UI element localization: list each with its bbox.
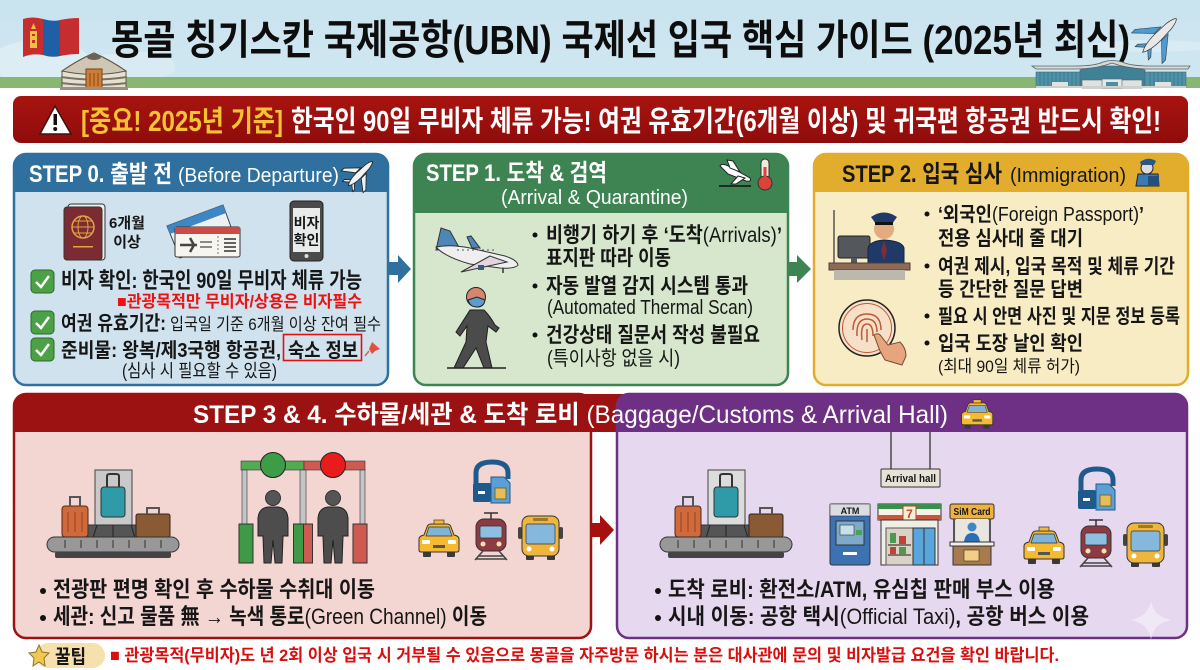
text: step 1 bullets: (특이사항 없을 시) bbox=[547, 347, 680, 370]
heading: step 0 bbox=[29, 161, 339, 188]
icon: bus bbox=[1123, 523, 1168, 567]
icon: airport terminal bbox=[1032, 60, 1190, 88]
header background: sky and grass bbox=[0, 0, 1200, 88]
red note: business needs visa: ■관광목적만 무비자/상용은 비자필수 bbox=[117, 292, 362, 311]
text: step 2 bullets bbox=[924, 203, 1180, 376]
text: step 4 bullets: 도착 로비: 환전소/ATM, 유심칩 판매 부스 이용 bbox=[668, 577, 1055, 602]
text: step 2 bullets: ‘외국인(Foreign Passport)’ bbox=[938, 203, 1144, 226]
alert banner bbox=[13, 96, 1188, 143]
arrow: step 3 to step 4 bbox=[591, 515, 614, 545]
text: 6 months or more bbox=[109, 215, 145, 251]
icon: Mongolian flag bbox=[23, 18, 79, 57]
icon: landing plane bbox=[719, 160, 751, 186]
panel: step 0 before departure bbox=[14, 151, 388, 385]
text: step 1 bullets: 표지판 따라 이동 bbox=[546, 247, 671, 270]
icon: pin bbox=[365, 342, 380, 356]
panel: step 2 immigration bbox=[814, 154, 1188, 385]
text: step 1 bullets: 자동 발열 감지 시스템 통과 bbox=[546, 275, 748, 298]
icon: train bbox=[475, 513, 507, 560]
icon: bus and SIM bbox=[1078, 469, 1115, 510]
heading: step 2 bbox=[842, 161, 1126, 188]
text: step 1 bullets: (Automated Thermal Scan) bbox=[547, 297, 753, 319]
icon: hanging arrival hall sign: Arrival hall bbox=[885, 473, 936, 485]
tip note: ■ 관광목적(무비자)도 년 2회 이상 입국 시 거부될 수 있음으로 몽골을 자주방문 하시는 분은 대사관에 문의 및 비자발급 요건을 확인 바랍니다. bbox=[110, 646, 1059, 665]
arrow: step 1 to step 2 bbox=[788, 255, 811, 283]
text: step 1 bullets: 건강상태 질문서 작성 불필요 bbox=[546, 324, 760, 347]
icon: warning triangle bbox=[40, 106, 71, 134]
panel: step 4 arrival hall bbox=[617, 394, 1187, 640]
text: step 3 bullets: 전광판 편명 확인 후 수하물 수취대 이동 bbox=[53, 577, 375, 602]
icon: baggage carousel bbox=[47, 470, 179, 558]
icon: hanging arrival hall sign bbox=[881, 432, 940, 487]
icon: customs gates green and red bbox=[239, 452, 367, 563]
icon: flight tickets bbox=[167, 205, 240, 258]
checklist: passport validity bbox=[31, 311, 381, 335]
checklist: passport validity: 입국일 기준 6개월 이상 잔여 필수 bbox=[170, 315, 381, 334]
icon: SIM card booth: SiM Card bbox=[954, 507, 990, 518]
icon: convenience store: 7 bbox=[906, 507, 913, 521]
text: 6 months or more: 6개월 bbox=[109, 215, 145, 232]
heading: step 1: (Arrival & Quarantine) bbox=[501, 187, 688, 209]
tip badge bbox=[29, 643, 105, 668]
icon: convenience store bbox=[878, 504, 941, 565]
text: 6 months or more: 이상 bbox=[113, 234, 141, 251]
checklist: documents: 준비물: 왕복/제3국행 항공권, bbox=[61, 339, 281, 362]
icon: ATM machine: ATM bbox=[841, 506, 859, 516]
icon: thermometer bbox=[758, 159, 772, 190]
icon: taxi bbox=[1024, 527, 1064, 564]
text: step 4 bullets bbox=[655, 577, 1089, 629]
text: step 3 bullets bbox=[40, 577, 487, 629]
icon: ATM machine bbox=[830, 504, 870, 565]
heading: step 2: (Immigration) bbox=[1010, 165, 1126, 187]
icon: bus bbox=[518, 516, 563, 560]
icon: fingerprint with hand bbox=[839, 300, 906, 365]
icon: airplane side view bbox=[436, 228, 518, 273]
icon: taxi in heading bbox=[962, 400, 993, 429]
text: step 2 bullets: (최대 90일 체류 허가) bbox=[938, 357, 1080, 376]
icon: ger yurt bbox=[60, 53, 128, 90]
icon: phone visa check: 비자 bbox=[294, 215, 319, 231]
text: step 2 bullets: 전용 심사대 줄 대기 bbox=[938, 227, 1083, 250]
icon: passport bbox=[64, 204, 105, 260]
icon: train bbox=[1080, 520, 1112, 567]
icon: phone visa check bbox=[290, 201, 323, 261]
text: step 1 bullets bbox=[532, 224, 782, 370]
text: may be needed at inspection: (심사 시 필요할 수 있음) bbox=[122, 361, 277, 381]
icon: SIM card booth bbox=[950, 504, 994, 565]
tip badge: 꿀팁 bbox=[55, 646, 86, 668]
text: step 2 bullets: 등 간단한 질문 답변 bbox=[938, 278, 1083, 301]
icon: sparkle watermark bbox=[1130, 600, 1172, 640]
heading: step 1: STEP 1. 도착 & 검역 bbox=[426, 160, 607, 187]
arrow: step 0 to step 1 bbox=[389, 255, 411, 283]
heading: steps 3 and 4: STEP 3 & 4. 수하물/세관 & 도착 로비 (Baggage/Customs & Arrival Hall) bbox=[193, 401, 948, 429]
checklist: visa: 비자 확인: 한국인 90일 무비자 체류 가능 bbox=[61, 268, 362, 293]
icon: officer badge bbox=[1136, 159, 1159, 186]
icon: taxi bbox=[419, 520, 459, 557]
checklist: passport validity: 여권 유효기간: bbox=[61, 312, 166, 335]
alert text yellow: [중요! 2025년 기준] bbox=[81, 105, 283, 138]
icon: small plane bbox=[337, 151, 383, 197]
heading: step 0: STEP 0. 출발 전 bbox=[29, 161, 172, 188]
heading: step 1 bbox=[426, 160, 688, 209]
text: step 3 bullets: 세관: 신고 물품 無 → 녹색 통로(Green Channel) 이동 bbox=[53, 604, 487, 629]
text: step 4 bullets: 시내 이동: 공항 택시(Official Taxi), 공항 버스 이용 bbox=[668, 604, 1089, 629]
icon: baggage carousel bbox=[660, 470, 792, 558]
text: step 2 bullets: 입국 도장 날인 확인 bbox=[938, 332, 1083, 355]
icon: bus and SIM bbox=[473, 462, 510, 503]
icon: airplane top right bbox=[1126, 3, 1192, 69]
heading: step 2: STEP 2. 입국 심사 bbox=[842, 161, 1002, 188]
heading: step 0: (Before Departure) bbox=[178, 165, 339, 187]
icon: immigration officer at desk bbox=[829, 210, 910, 280]
icon: phone visa check: 확인 bbox=[294, 232, 319, 248]
highlighted lodging info: 숙소 정보 bbox=[288, 339, 358, 362]
panel: step 3 baggage and customs bbox=[14, 394, 630, 638]
panel: step 1 arrival bbox=[414, 154, 788, 385]
icon: masked walking person bbox=[447, 288, 506, 368]
text: step 1 bullets: 비행기 하기 후 ‘도착(Arrivals)’ bbox=[546, 224, 782, 247]
